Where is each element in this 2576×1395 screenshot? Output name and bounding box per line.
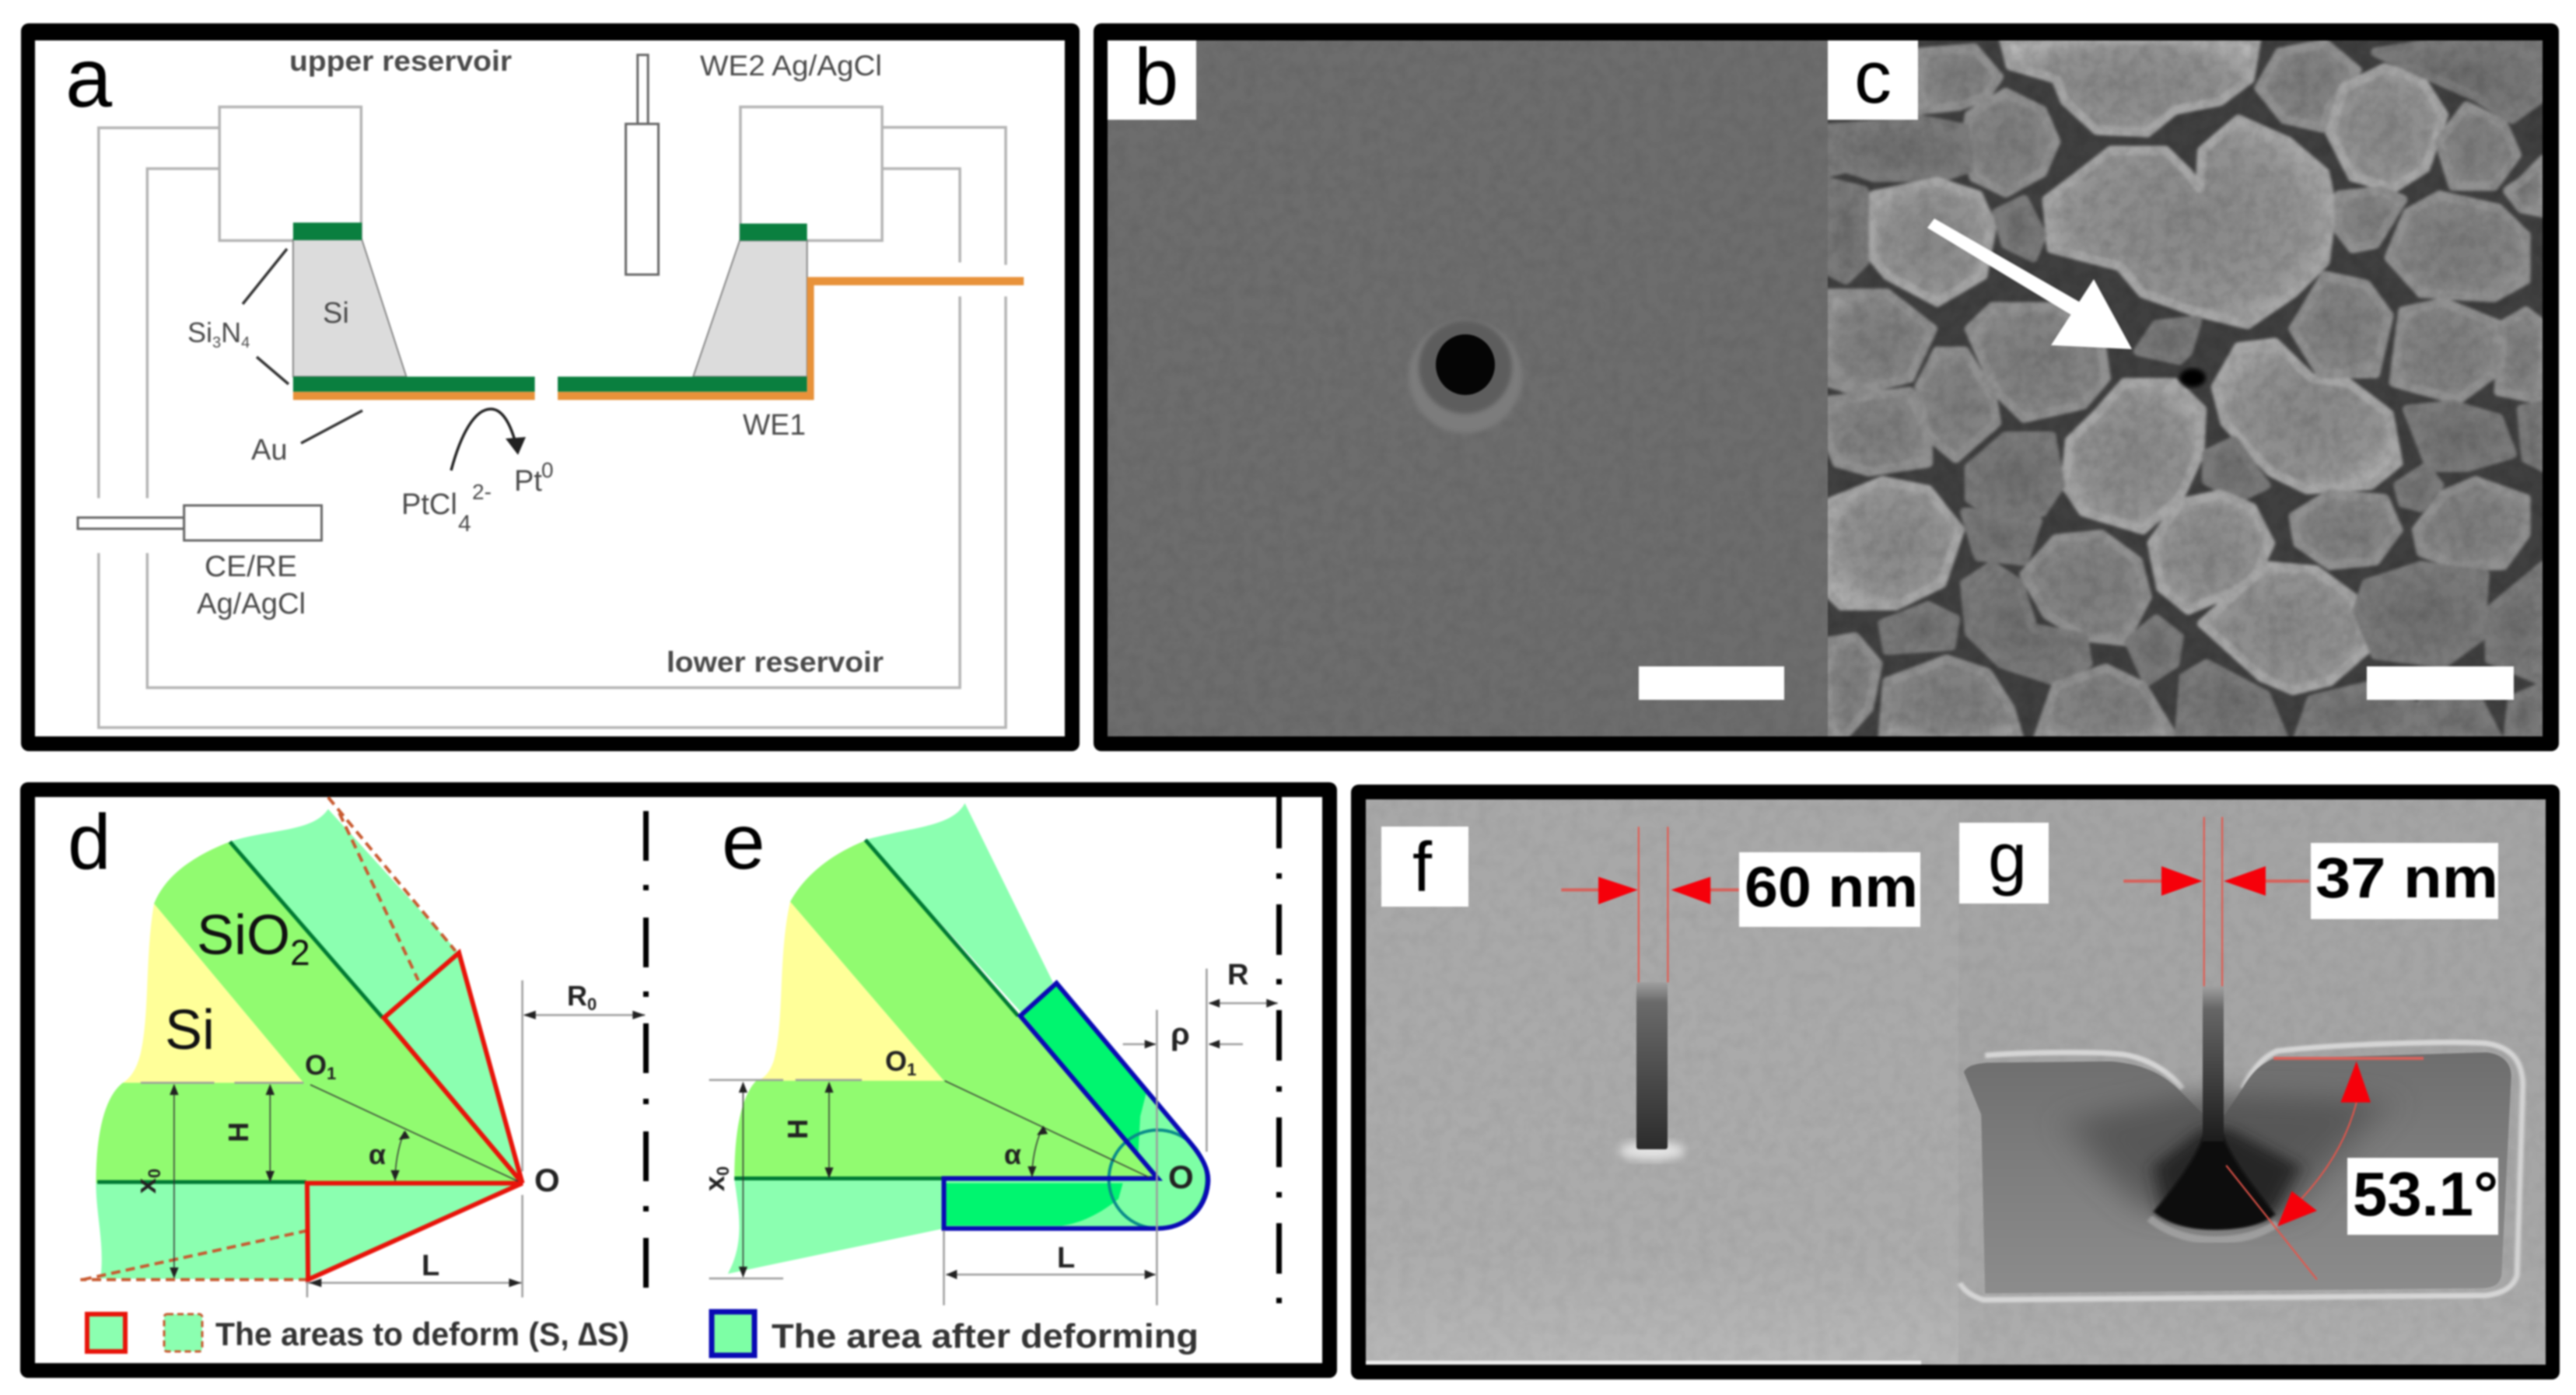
f bottom white line: [1366, 1361, 1921, 1365]
dimension lines e: [709, 969, 1278, 1306]
material labels d: Si: [165, 999, 215, 1061]
dimension labels d: H: [222, 1122, 254, 1142]
panel a text labels: WE1: [743, 409, 806, 442]
dimension labels d: x: [130, 1178, 162, 1194]
scale bar c: [2367, 666, 2514, 700]
label c: c: [1854, 36, 1892, 119]
dimension lines d: [141, 981, 645, 1297]
panel frame: f and g: [1351, 785, 2560, 1379]
panel c: SEM image of gold grains: [1828, 36, 2543, 739]
dimension labels e: [698, 959, 1248, 1274]
panel a text labels: Si: [187, 316, 212, 348]
dimension labels d: L: [422, 1250, 439, 1282]
layered cross-section d: [96, 809, 523, 1280]
reservoir walls and cell outlines: [99, 107, 1006, 728]
dimension labels d: 0: [145, 1169, 164, 1178]
dimension labels e: ρ: [1171, 1017, 1190, 1051]
legend d: The areas to deform (S, ∆S): [215, 1316, 629, 1352]
legend e: The area after deforming: [772, 1317, 1199, 1355]
reaction arrow: [451, 409, 526, 470]
panels f and g: FIB SEM images: [1366, 799, 2546, 1365]
label f: f: [1412, 829, 1433, 907]
panel e: geometry after deformation: [698, 797, 1282, 1355]
gold grains: [1828, 39, 2543, 739]
f width label: 60 nm: [1745, 856, 1918, 919]
g milled pit: [1960, 1043, 2523, 1300]
pinhole defect: [2179, 369, 2206, 387]
panel letter d: d: [68, 799, 111, 886]
panel d: geometry before deformation: [68, 797, 649, 1352]
g width label: 37 nm: [2315, 847, 2498, 910]
panel a text labels: Si: [323, 297, 349, 330]
dimension labels e: R: [1227, 959, 1248, 991]
dimension labels e: O: [1168, 1159, 1194, 1195]
dimension labels d: 0: [587, 995, 597, 1014]
dimension labels d: α: [369, 1138, 386, 1170]
rounded tip circle: [1109, 1130, 1206, 1229]
CE/RE electrode: [78, 505, 321, 540]
axis line d: [643, 811, 649, 1288]
f red markers: [1561, 827, 1739, 982]
panel a text labels: N: [221, 316, 241, 348]
panel a text labels: lower reservoir: [667, 646, 884, 678]
label b: [1108, 32, 1196, 121]
dimension labels e: α: [1004, 1138, 1021, 1170]
material labels d: [165, 904, 310, 1061]
dimension labels e: L: [1057, 1242, 1075, 1274]
label g: [1959, 820, 2049, 904]
panel a text labels: CE/RE: [205, 551, 297, 583]
pore halo: [1409, 320, 1522, 433]
layered cross-section e: [728, 803, 1208, 1274]
dimension labels d: O: [305, 1049, 327, 1081]
label b: b: [1134, 32, 1178, 121]
red deform regions: [307, 953, 523, 1280]
dimension labels e: 0: [713, 1166, 733, 1176]
panel a text labels: WE2 Ag/AgCl: [700, 50, 882, 82]
leader lines: [243, 249, 362, 443]
blue deformed outline: [944, 983, 1208, 1229]
panel a text labels: 4: [241, 334, 250, 351]
silicon chip and membrane: [293, 222, 1024, 400]
panel a text labels: 3: [212, 334, 221, 351]
dimension labels e: O: [885, 1045, 907, 1077]
dimension labels d: O: [534, 1162, 560, 1198]
panel a text labels: [187, 45, 884, 678]
scale bar b: [1639, 666, 1784, 700]
g slit: [2203, 986, 2224, 1142]
panel a: electrochemical cell schematic: [21, 23, 1080, 751]
dimension labels e: 1: [907, 1060, 916, 1079]
panel letter a: a: [65, 30, 113, 124]
panel frame: b and c: [1094, 23, 2559, 751]
panel a text labels: 2-: [472, 480, 492, 504]
dimension labels d: [130, 980, 597, 1282]
label f: [1381, 827, 1468, 907]
dimension labels d: 1: [327, 1064, 336, 1083]
dimension labels d: R: [567, 980, 587, 1012]
WE2 electrode: [626, 55, 659, 274]
label g: g: [1988, 820, 2027, 897]
panel a text labels: upper reservoir: [289, 45, 512, 77]
axis line e: [1276, 797, 1282, 1303]
panel a text labels: 4: [458, 511, 471, 537]
panel a text labels: 0: [541, 458, 554, 482]
dashed deform outlines: [80, 797, 455, 1280]
g angle label: 53.1°: [2353, 1159, 2498, 1229]
white arrow: [1927, 219, 2132, 349]
panel a text labels: PtCl: [401, 488, 457, 521]
dimension labels e: H: [782, 1119, 814, 1139]
panel a text labels: Pt: [514, 465, 542, 498]
f slit: [1619, 982, 1685, 1160]
material labels d: SiO: [197, 904, 290, 967]
g red markers: [2123, 817, 2424, 1280]
panel a text labels: Ag/AgCl: [197, 588, 306, 621]
pore hole: [1436, 334, 1495, 395]
dimension labels e: x: [698, 1176, 730, 1191]
panel a text labels: Au: [251, 434, 287, 467]
label c: [1828, 36, 1918, 120]
material labels d: 2: [290, 932, 310, 973]
panel frame: d and e: [20, 782, 1337, 1378]
panel letter e: e: [722, 799, 765, 886]
panel b: SEM image of pore: [1108, 32, 1828, 736]
